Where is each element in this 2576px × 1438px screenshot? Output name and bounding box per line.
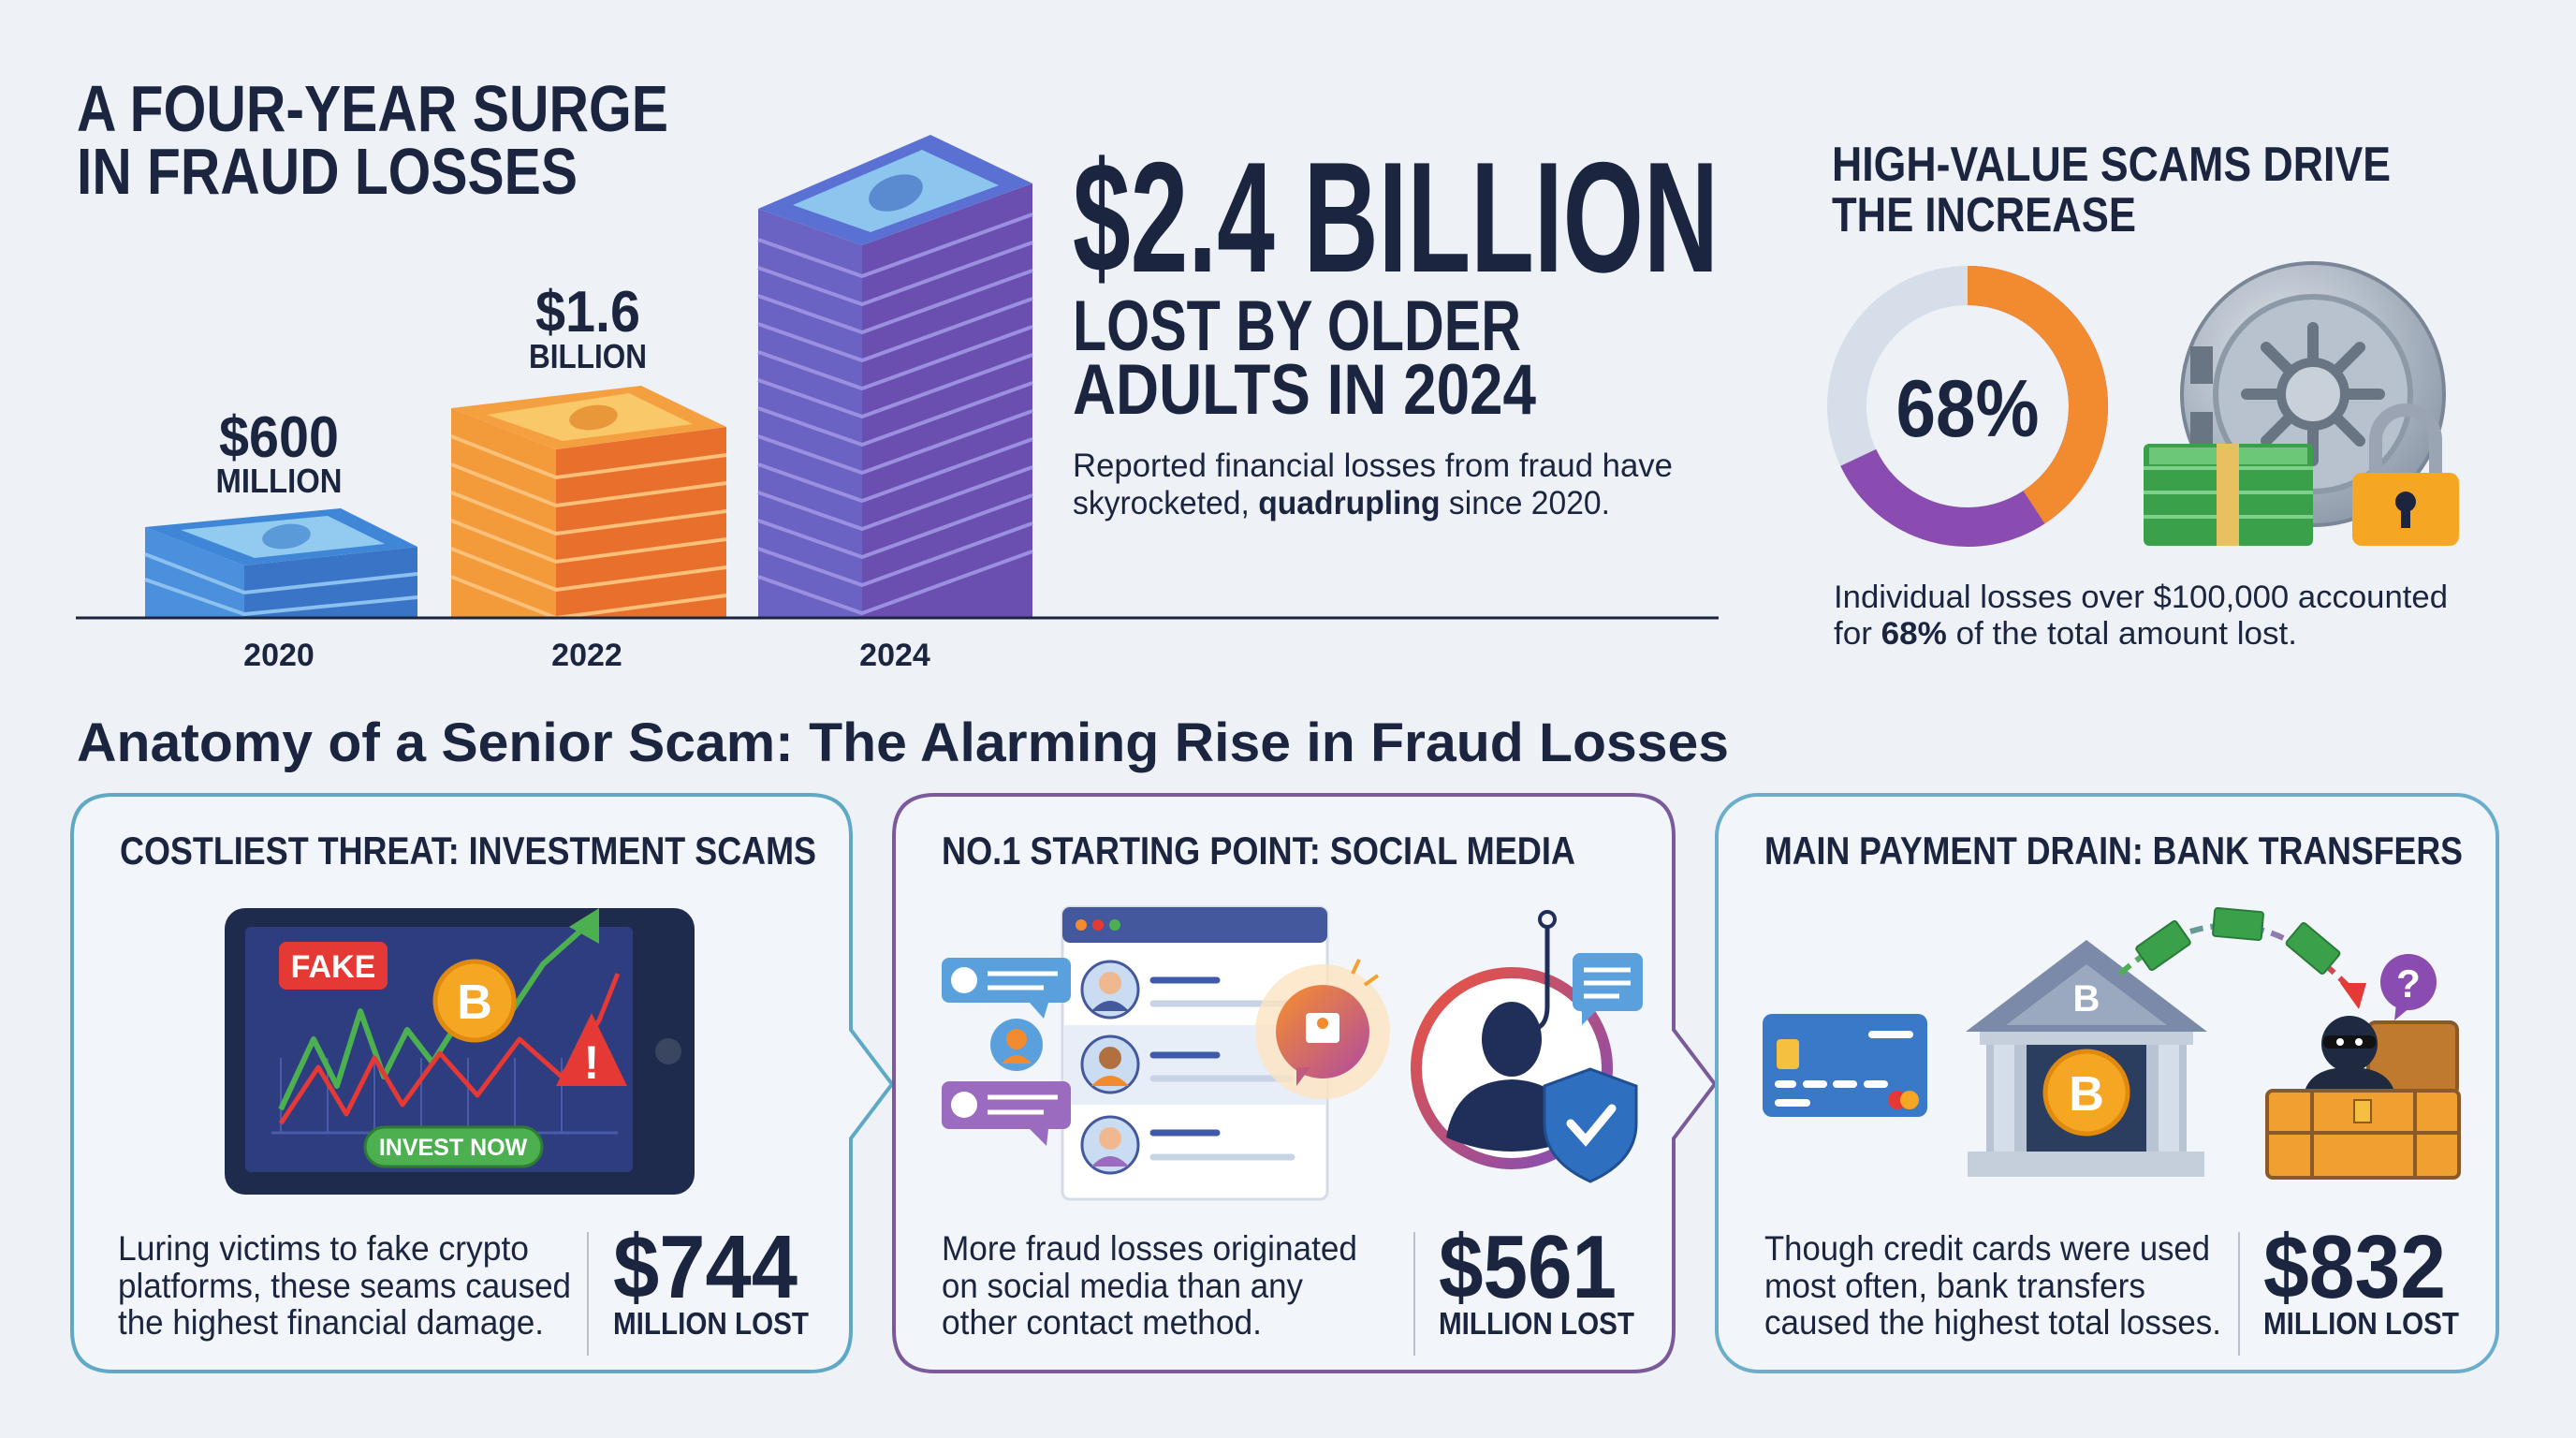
bar labels: $1.6 [535, 280, 640, 345]
bar labels: 2022 [551, 638, 622, 673]
body text [118, 1229, 571, 1342]
headline stat: $2.4 billion: Reported financial losses from fraud have [1073, 448, 1673, 484]
bar labels: $600 [219, 405, 339, 470]
padlock [2376, 410, 2436, 479]
body text: More fraud losses originated [942, 1229, 1357, 1268]
text: individual losses: Individual losses over $100,000 accounted [1834, 580, 2448, 615]
text: individual losses: for 68% of the total amount lost. [1834, 616, 2297, 652]
stat: $561 million: MILLION LOST [1439, 1306, 1634, 1341]
body text: on social media than any [942, 1267, 1303, 1305]
icon: tablet with fake crypto chart: ! [584, 1036, 599, 1089]
panel: bank transfers [1717, 795, 2497, 1372]
body text: other contact method. [942, 1303, 1262, 1342]
donut chart 68%: 68% [1896, 364, 2039, 454]
money stack [2144, 444, 2313, 546]
bar labels: MILLION [215, 462, 343, 500]
icon: vault with money and padlock [2144, 263, 2459, 546]
stat: $832 million: MILLION LOST [2263, 1306, 2459, 1341]
icon: card, bank and thief: B [2069, 1067, 2104, 1122]
icon: tablet with fake crypto chart: INVEST NOW [379, 1135, 528, 1161]
headline stat: $2.4 billion: ADULTS IN 2024 [1073, 350, 1536, 430]
icon: social feed and phishing [942, 907, 1643, 1199]
panel heading: COSTLIEST THREAT: INVESTMENT SCAMS [120, 829, 816, 873]
icon: card, bank and thief: B [2073, 978, 2100, 1020]
stack 2024 [758, 135, 1032, 618]
panel heading: NO.1 STARTING POINT: SOCIAL MEDIA [942, 829, 1575, 873]
axis line [76, 616, 1719, 620]
stat: $744 million: MILLION LOST [613, 1306, 809, 1341]
stat: $744 million: $744 [613, 1217, 798, 1317]
heading: high-value scams: THE INCREASE [1832, 188, 2136, 242]
stat: $832 million: $832 [2263, 1217, 2446, 1317]
panel: social media [894, 795, 1715, 1372]
section heading: Anatomy of a Senior Scam: The Alarming Rise in Fraud Losses [77, 712, 1729, 773]
heading: high-value scams: HIGH-VALUE SCAMS DRIVE [1832, 138, 2391, 192]
bar chart: money stacks [76, 135, 1719, 618]
title [77, 72, 668, 208]
bar labels: BILLION [529, 337, 647, 375]
donut chart 68% [1847, 286, 2088, 527]
body text: Though credit cards were used [1764, 1229, 2210, 1268]
headline stat: $2.4 billion: LOST BY OLDER [1073, 286, 1521, 366]
body text [1764, 1229, 2221, 1342]
stack 2020 [145, 508, 417, 618]
bar labels [215, 280, 930, 673]
panel: investment scams [72, 795, 892, 1372]
panel heading: MAIN PAYMENT DRAIN: BANK TRANSFERS [1764, 829, 2463, 873]
icon: tablet with fake crypto chart: FAKE [291, 949, 375, 985]
text: individual losses [1834, 580, 2448, 652]
body text: caused the highest total losses. [1764, 1303, 2221, 1342]
title: IN FRAUD LOSSES [77, 135, 578, 208]
bar labels: 2024 [859, 638, 930, 673]
headline stat: $2.4 billion [1073, 129, 1719, 521]
stat: $561 million: $561 [1439, 1217, 1617, 1317]
body text: most often, bank transfers [1764, 1267, 2145, 1305]
title: A FOUR-YEAR SURGE [77, 72, 668, 145]
icon: card, bank and thief: ? [2396, 961, 2421, 1005]
body text [942, 1229, 1357, 1342]
stack 2022 [451, 386, 726, 618]
body text: the highest financial damage. [118, 1303, 544, 1342]
icon: card, bank and thief [1763, 908, 2459, 1178]
icon: tablet with fake crypto chart [225, 908, 695, 1195]
icon: tablet with fake crypto chart: B [457, 976, 492, 1030]
headline stat: $2.4 billion: skyrocketed, quadrupling since 2020. [1073, 485, 1610, 521]
headline stat: $2.4 billion: $2.4 BILLION [1073, 129, 1719, 305]
heading: high-value scams [1832, 138, 2391, 242]
body text: platforms, these seams caused [118, 1267, 571, 1305]
body text: Luring victims to fake crypto [118, 1229, 529, 1268]
bar labels: 2020 [243, 638, 315, 673]
